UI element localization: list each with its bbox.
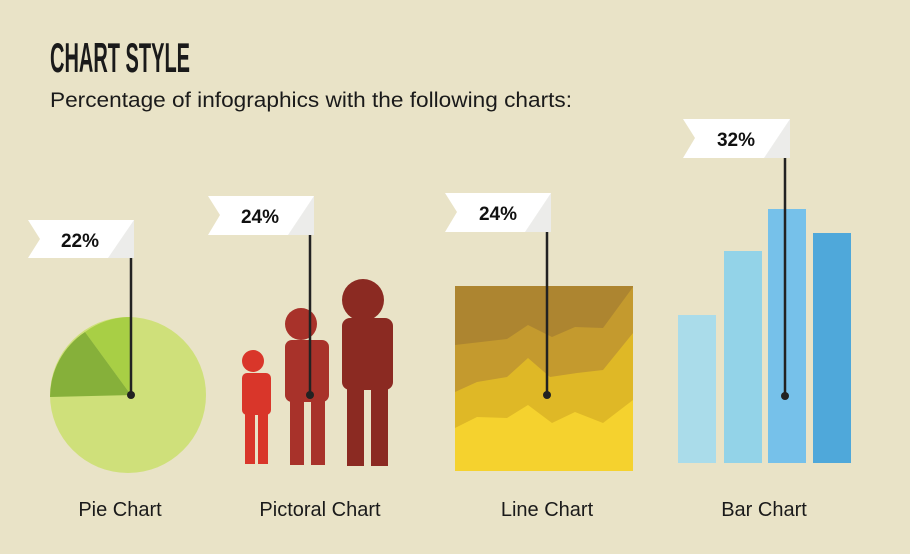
label: Bar Chart: Bar Chart: [721, 499, 807, 521]
flag: 22%: 22%: [61, 231, 99, 252]
subtitle: Percentage of infographics with the following charts:: [50, 89, 572, 112]
pie chart: [50, 317, 206, 473]
flag: 22%: [28, 220, 135, 399]
text: CHART STYLE: [50, 34, 190, 81]
label: Pictoral Chart: Pictoral Chart: [259, 499, 381, 521]
label: Pie Chart: Pie Chart: [78, 499, 162, 521]
label: Line Chart: Line Chart: [501, 499, 594, 521]
flag: 32% bar: [683, 119, 790, 400]
pictorial chart: children silhouettes: [242, 279, 393, 466]
bar chart: [678, 209, 851, 463]
flag: 24% pictorial: [208, 196, 314, 399]
icon: small child: [242, 350, 271, 464]
flag: 24% pictorial: 24%: [241, 207, 279, 228]
icon: middle child: [285, 308, 329, 465]
flag: 24% line: [445, 193, 551, 399]
flag: 24% line: 24%: [479, 204, 517, 225]
icon: tall child: [342, 279, 393, 466]
line (area) chart: [455, 286, 633, 471]
flag: 32% bar: 32%: [717, 130, 755, 151]
